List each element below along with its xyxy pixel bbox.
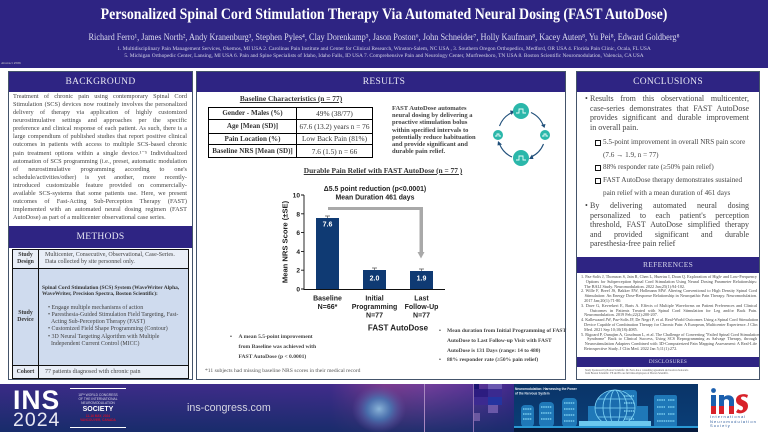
y tick labels: [293, 192, 300, 294]
disclosures text: Study Sponsored by Boston Scientific. Dr. Ferro has a consulting agreement and receives honoraria: [585, 369, 688, 372]
y axis: [301, 195, 445, 290]
footnote: *11 subjects had missing baseline NRS scores in their medical record: [205, 368, 360, 374]
bars: [316, 218, 433, 289]
row: pain location: [209, 134, 372, 145]
congress box: 18ᵀᴴ WORLD CONGRESS: [78, 392, 118, 396]
background text: [13, 93, 187, 221]
text: improvement bullet: [230, 334, 316, 360]
Vancouver science world image: of the Nervous System: [515, 392, 550, 396]
references list: Neurostimulation Adapters Combined with 3D-Computerized Pain Mapping Assessment: A Real-Life: [585, 341, 757, 346]
text: FAST AutoDose description: proactive stimulation bolus: [392, 119, 467, 126]
references list: Syndrome" Back to Clinical Success, Using SCS Reprogramming as Salvage Therapy, through: [587, 336, 757, 341]
references list: 5. Rigoard P, Ounajim A, Goudman L, et al. The Challenge of Converting "Failed Spinal Cord Stimulation: [581, 332, 760, 337]
heading: conclusions: [577, 72, 759, 92]
text: FAST AutoDose description: durable pain relief.: [392, 148, 445, 155]
list: device features: • Customized Field Shape Programming (Contour): [48, 326, 168, 332]
background text: automation of SCS programming (i.e., preset, automatic modulation: [13, 158, 187, 165]
website: ins-congress.com: [187, 402, 271, 414]
conclusion 2: paresthesia-free pain relief: [590, 239, 675, 248]
background text: delivery of therapy via application of highly customized: [13, 109, 187, 116]
conclusion sub-points: (7.6 → 1.9, n = 77): [603, 151, 659, 159]
label: cohort: Cohort: [17, 369, 34, 375]
conclusion 2: By delivering automated neural dosing: [590, 201, 749, 210]
label: study device: [13, 269, 39, 365]
references list: 3. Dave G, Kevrekeri E, Baris A. Effects of Multiple Waveforms on Patient Preferences and Clinical: [581, 303, 757, 308]
background text: introduced customizable feature provided on commercially-: [13, 182, 187, 189]
label: study device: Study: [18, 310, 33, 316]
row: cohort: [12, 365, 189, 379]
y tick labels: 10: [293, 192, 300, 200]
references list: Stimulation: An Energy Dose-Response Relationship in Neuropathic Pain Therapy. Neuromodulation.: [585, 293, 757, 298]
bar values: 1.9: [417, 276, 426, 282]
label: study device: Device: [17, 317, 34, 323]
bar labels: N=77: [366, 312, 383, 320]
references list: [581, 274, 760, 351]
references list: Outcomes in Patients Treated with Spinal Cord Stimulation for Leg and/or Back Pain.: [590, 308, 757, 313]
background text: outcomes in patients with access to multiple SCS-based chronic: [13, 141, 187, 148]
references list: 2017 Jan;20(1):71-80.: [584, 298, 621, 303]
background text: schedule/activities/other) is yet another, more recently-: [13, 174, 187, 181]
abstract number: Abstract #586: [1, 61, 21, 65]
title: Personalized Spinal Cord Stimulation Therapy Via Automated Neural Dosing (FAST AutoDose): [101, 6, 667, 23]
bar chart: [280, 186, 445, 331]
reduction bracket arrow: [328, 207, 424, 258]
INS 2024 logo: [13, 385, 60, 431]
y tick labels: 6: [296, 230, 300, 237]
text: study device: Spinal Cord Stimulation (SCS) System (WaveWriter Alpha,: [42, 285, 179, 291]
list: device features: • Paresthesia-Guided Stimulation Field Targeting, Fast-: [48, 312, 178, 318]
logo text: Society: [710, 423, 731, 428]
methods table: [12, 249, 189, 379]
heading: references: [577, 257, 759, 273]
bar labels: [313, 296, 438, 320]
panel: results: [196, 71, 566, 380]
text: duration bullets: Mean duration from Initial Programming of FAST: [447, 328, 566, 334]
background text: AutoDose) as part of a multicenter observational case series.: [13, 214, 166, 221]
table: baseline characteristics: [208, 107, 373, 158]
text: improvement bullet: A mean 5.5-point improvement: [238, 334, 313, 340]
background text: available SCS-systems that some patients use. Here, we present: [13, 190, 187, 197]
background text: large compendium of published studies that report positive clinical: [13, 133, 187, 140]
references list: Med. 2021 Sep 10;10(18):4085.: [584, 327, 638, 332]
row: baseline NRS: 7.6 (1.5) n = 66: [312, 147, 357, 156]
conclusion 2: [585, 201, 749, 248]
row: baseline NRS: [212, 145, 357, 157]
conclusion 1: [585, 94, 749, 132]
heading: methods: METHODS: [76, 232, 125, 242]
label: cohort: [13, 366, 39, 378]
header banner: [0, 0, 768, 68]
text: duration bullets: AutoDose is 131 Days (range: 14 to 480): [447, 348, 540, 354]
bar labels: Baseline: [313, 296, 342, 302]
bar labels: Programming: [352, 304, 397, 311]
congress date: 11-16 MAY, 2024: [86, 414, 110, 418]
chart title: [324, 186, 426, 202]
list: device features: [48, 304, 178, 347]
affiliations: 5. Michigan Orthopedic Center, Lansing, MI USA 6. Pain and Spine Specialists of Idaho, Idaho Falls, ID USA 7. Comprehensive Pain and Neurology Center, Murfreesboro, TN USA 8. Boston Scientific Neuromodulation, Valencia, CA USA: [124, 53, 644, 59]
row: age: [209, 120, 372, 134]
conclusion sub-points: 5.5-point improvement in overall NRS pain score: [603, 138, 745, 146]
text: FAST AutoDose description: potentially reduce habituation: [392, 134, 476, 141]
background text: of neurostimulative programming according to one's: [13, 166, 187, 173]
row: pain location: Pain Location (%): [225, 135, 280, 143]
conclusion sub-points: pain relief with a mean duration of 461 days: [603, 189, 730, 197]
congress box: [70, 388, 126, 428]
heading: references: REFERENCES: [643, 260, 693, 269]
text: improvement bullet: from Baseline was achieved with: [238, 344, 316, 350]
row: gender: 49% (38/77): [316, 109, 353, 118]
text: study design: Multicenter, Consecutive, Observational, Case-Series.: [45, 252, 175, 258]
label: study design: Design: [17, 259, 34, 265]
text: FAST AutoDose description: FAST AutoDose automates: [392, 105, 467, 112]
chart title: Mean Duration 461 days: [336, 194, 415, 202]
heading: baseline characteristics: Baseline Characteristics (n = 77): [240, 94, 342, 103]
text: FAST AutoDose description: and provide significant and: [392, 141, 468, 148]
affiliations: 1. Multidisciplinary Pain Management Services, Okemos, MI USA 2. Carolinas Pain Institute and Center for Clinical Research, Winston-Salem, NC USA , 3. Southern Oregon Orthopedics, Medford, OR USA 4. Florida Pain Clinic, Ocala, FL USA: [117, 46, 651, 52]
list: device features: • 3D Neural Targeting Algorithm with Multiple: [48, 334, 159, 340]
disclosures text: [585, 368, 688, 375]
pixel squares: [474, 384, 502, 421]
conclusion sub-points: [595, 138, 746, 197]
image caption: Neuromodulation: Harnessing the Power: [515, 387, 578, 391]
background text: Treatment of chronic pain using contemporary Spinal Cord: [13, 93, 187, 100]
heading: durable pain relief: Durable Pain Relief with FAST AutoDose (n = 77 ): [304, 166, 462, 175]
heading: methods: [9, 226, 192, 248]
authors: Richard Ferro¹, James North², Andy Kranenburg³, Stephen Pyles⁴, Clay Dorenkamp⁵, Jason Poston⁶, John Schneider⁷, Holly Kaufman⁸, Kacey Auten⁸, Yu Pei⁸, Edward Goldberg⁸: [89, 32, 679, 42]
panel: conclusions and references: •: [585, 201, 588, 210]
swirl graphic: [356, 389, 402, 431]
conclusion 1: case-series demonstrates that FAST AutoDose: [590, 104, 749, 113]
row: age: 67.6 (13.2) years n = 76: [300, 122, 369, 131]
y tick labels: 4: [296, 249, 300, 256]
heading: results: RESULTS: [363, 77, 405, 87]
text: FAST AutoDose description: within specified intervals to: [392, 127, 468, 134]
text: FAST AutoDose description: [392, 105, 476, 155]
International Neuromodulation Society logo: [698, 384, 768, 432]
heading: background: [9, 72, 192, 92]
references list: Device Capable of Combination Therapy for Chronic Pain: A European, Multicenter Experience. J Clin: [584, 322, 757, 327]
row: pain location: Low Back Pain (81%): [302, 134, 367, 143]
bar labels: N=66*: [318, 304, 338, 311]
disclosures text: from Boston Scientific. YP and EG are full time employees of Boston Scientific.: [585, 372, 669, 375]
bar labels: N=77: [413, 312, 430, 320]
footer banner: [0, 384, 768, 432]
y tick labels: 0: [296, 286, 300, 294]
bar values: 2.0: [370, 276, 379, 282]
conclusion 1: in overall pain.: [590, 123, 638, 132]
conclusion 2: threshold, FAST AutoDose simplified therapy: [590, 220, 749, 229]
bar labels: Initial: [365, 296, 384, 302]
logo mark: [711, 388, 748, 414]
references list: Options for Subperception Spinal Cord Stimulation Using Neural Dosing Parameter Relationships:: [586, 279, 757, 284]
text: FAST AutoDose description: neural dosing by delivering a: [392, 112, 473, 119]
row: baseline NRS: Baseline NRS [Mean (SD)]: [212, 147, 293, 155]
text: cohort: 77 patients diagnosed with chronic pain: [45, 369, 140, 375]
text: study device: [42, 285, 179, 297]
background text: outcomes of Fast-Acting Sub-Perception Therapy (FAST): [13, 198, 187, 205]
conclusion sub-points: FAST AutoDose therapy demonstrates sustained: [603, 176, 742, 184]
row: study design: [12, 249, 189, 269]
background text: implemented with an automated neural dosing regimen (FAST: [13, 206, 187, 213]
heading: conclusions: CONCLUSIONS: [633, 77, 703, 87]
panel: conclusions and references: •: [585, 94, 588, 103]
row: gender: Gender - Males (%): [222, 109, 283, 117]
heading: disclosures: DISCLOSURES: [649, 359, 687, 365]
heading: background: BACKGROUND: [65, 77, 136, 87]
error bars: [325, 216, 424, 271]
bar values: [323, 222, 426, 282]
congress date: [80, 414, 116, 422]
panel: background and methods: [8, 71, 193, 380]
affiliations: [117, 46, 651, 59]
y tick labels: 2: [296, 268, 300, 275]
conclusion 2: personalized to each patient's perception: [590, 211, 749, 220]
text: study design: Data collected by site personnel only.: [45, 259, 135, 265]
references list: The BALI Study. Neuromodulation. 2022 Jan;25(1):94-102.: [584, 284, 685, 289]
text: study device: WaveWriter, Precision Spectra, Boston Scientific):: [42, 291, 158, 297]
y tick labels: 8: [296, 211, 300, 218]
conclusion 1: Results from this observational multicenter,: [590, 94, 749, 103]
text: duration bullets: •: [439, 328, 441, 334]
heading: disclosures: [577, 357, 759, 367]
congress box: NEUROMODULATION: [81, 401, 115, 405]
text: improvement bullet: FAST AutoDose (p < 0.0001): [238, 354, 306, 360]
label: study design: Study: [18, 252, 33, 258]
logo text: [710, 414, 757, 428]
text: duration bullets: AutoDose to Last Follow-up Visit with FAST: [447, 338, 552, 344]
list: device features: Independent Current Control (MICC): [51, 341, 139, 347]
text: improvement bullet: •: [230, 334, 232, 340]
background text: Stimulation (SCS) devices now routinely involves the personalized: [13, 101, 187, 108]
bar labels: Last: [414, 296, 429, 302]
chart title: Δ5.5 point reduction (p<0.0001): [324, 186, 426, 193]
list: device features: • Engage multiple mechanisms of action: [48, 305, 143, 311]
row: study device: [12, 268, 189, 366]
label: study design: [13, 250, 39, 268]
row: gender: [209, 108, 372, 120]
text: duration bullets: [439, 328, 566, 363]
icon: dosing cycle: [493, 103, 550, 166]
panel: conclusions and references: [576, 71, 760, 380]
conclusion sub-points: 88% responder rate (≥50% pain relief): [603, 163, 714, 171]
conclusion 2: and provided significant and durable: [590, 230, 749, 239]
congress date: VANCOUVER, CANADA: [80, 418, 116, 422]
conclusion 1: provides significant and durable improvement: [590, 113, 749, 122]
background text: neurostimulative settings and approaches per the specific: [13, 117, 187, 124]
bar labels: Follow-Up: [405, 304, 438, 311]
logo text: International: [710, 414, 746, 419]
vertical rules: [424, 384, 425, 432]
year: 2024: [13, 409, 60, 431]
text: study design: [45, 252, 175, 265]
y axis label: Mean NRS Score (±SE): [280, 200, 290, 283]
references list: Neuromodulation. 2019 Feb;22(2):200-207.: [584, 312, 658, 317]
references list: 4. Kallewaard JW, Paz-Solís JF, De Negri P, et al. Real-World Outcomes Using a Spinal Cord Stimulation: [581, 317, 758, 322]
row: age: Age [Mean (SD)]: [227, 122, 278, 130]
heading: results: [197, 72, 565, 92]
references list: Retrospective Study. J Clin Med. 2022 Jan 5;11(1):272.: [584, 346, 677, 351]
references list: 1. Paz-Solís J, Thomson S, Jain R, Chen L, Huertas I, Doan Q. Exploration of High- and Low-Frequency: [581, 274, 757, 279]
text: duration bullets: •: [439, 357, 441, 363]
bar values: 7.6: [323, 222, 332, 228]
references list: 2. Wille F, Breel JS, Bakker EW, Hollmann MW. Altering Conventional to High Density Spinal Cord: [581, 288, 757, 293]
text: duration bullets: 88% responder rate (≥50% pain relief): [447, 357, 538, 363]
logo text: Neuromodulation: [710, 419, 757, 424]
Vancouver science world image: [514, 384, 698, 432]
list: device features: Acting Sub-Perception Therapy (FAST): [51, 319, 145, 325]
congress box: OF THE INTERNATIONAL: [78, 397, 118, 401]
background text: preference and clinical response of each patient. As such, there is a: [13, 125, 187, 132]
background text: pain treatment options within a single device.¹⁻⁵ Individualized: [13, 150, 187, 157]
society: SOCIETY: [83, 406, 113, 413]
INS wordmark: INS: [13, 385, 60, 415]
